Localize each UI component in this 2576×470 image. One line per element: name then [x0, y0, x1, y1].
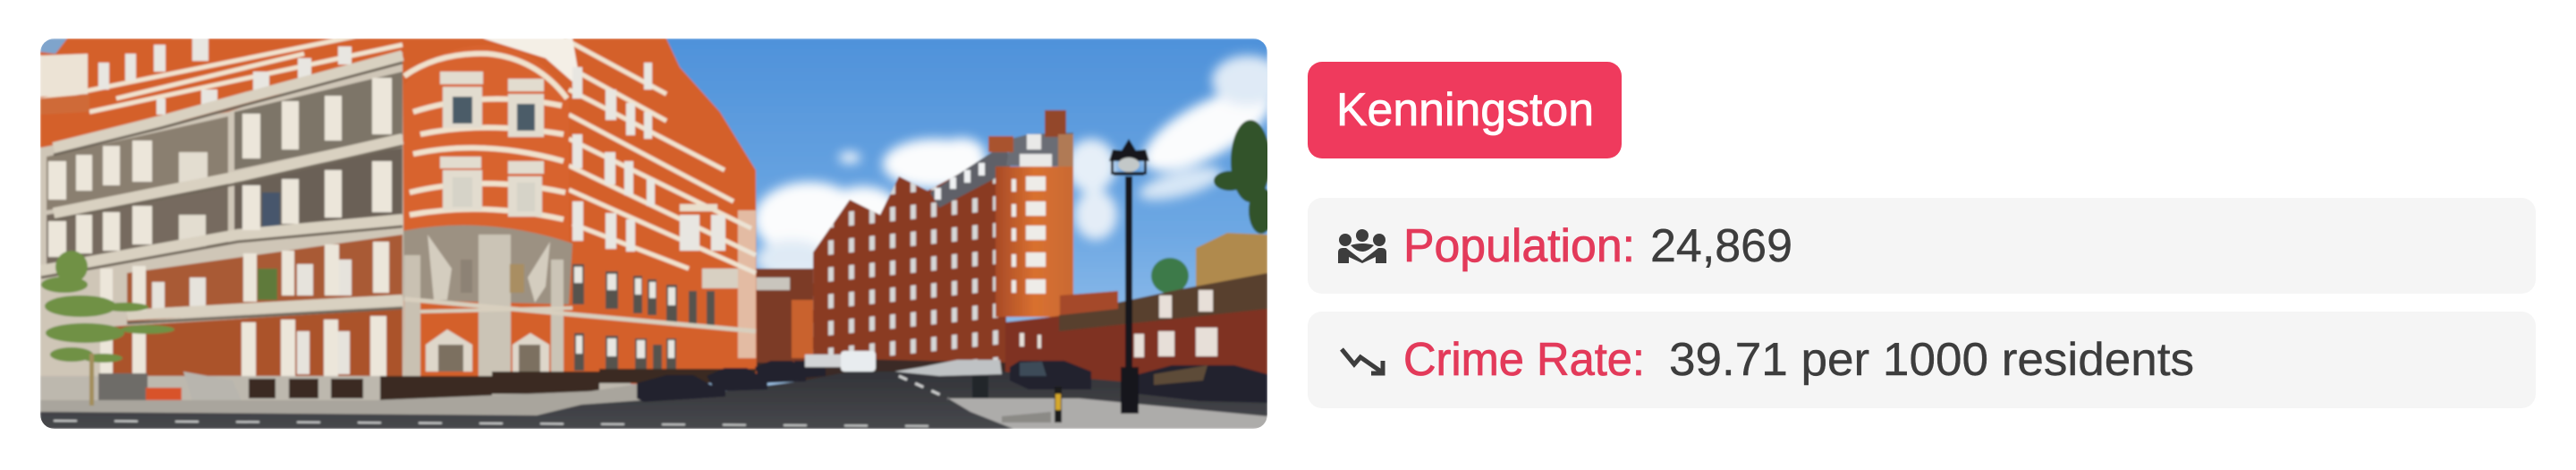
sky — [630, 38, 1267, 387]
distant buildings at street end — [754, 269, 813, 363]
railings and pavement — [40, 376, 631, 400]
district name badge: Kenningston — [1336, 84, 1594, 136]
balconies — [41, 56, 402, 315]
yellow brick building — [1196, 233, 1267, 286]
loggia — [40, 52, 404, 385]
small tree — [1151, 258, 1189, 294]
bin and bollard — [972, 376, 988, 398]
main dark brick block — [813, 158, 1006, 363]
right tree — [1214, 120, 1274, 234]
left wing stripes — [40, 27, 756, 273]
photo: Kennington street with red-brick mansion blocks — [40, 27, 1284, 429]
traffic island — [948, 398, 1267, 429]
left building: base brick — [40, 38, 757, 403]
curved corner tower — [567, 115, 570, 193]
crime rate row: 39.71 per 1000 residents — [1669, 334, 2194, 386]
white van and cars — [841, 351, 876, 372]
icon: falling trend arrow — [1342, 349, 1383, 373]
lamp post — [1109, 139, 1149, 414]
tower base windows — [426, 329, 549, 372]
tower windows — [440, 72, 544, 217]
clouds — [754, 56, 1284, 292]
district name badge — [1308, 62, 1622, 158]
wing windows — [98, 38, 352, 115]
icon: people group — [1338, 229, 1386, 263]
white bay on far corner — [738, 210, 756, 358]
columns — [48, 78, 392, 376]
population row — [1308, 198, 2536, 294]
road — [40, 372, 1267, 429]
population row: 24,869 — [1650, 220, 1792, 272]
parked cars — [637, 361, 1267, 403]
left street tree — [41, 251, 174, 363]
dark base behind cars — [755, 358, 1007, 381]
tower lower stonework — [402, 226, 572, 304]
top wing cream — [40, 38, 67, 54]
crime rate row — [1308, 312, 2536, 408]
orange corner tower — [996, 167, 1073, 317]
population row: Population: — [1403, 220, 1635, 272]
low terrace — [1004, 307, 1267, 383]
right building — [751, 110, 1073, 380]
recessed floors — [234, 72, 402, 170]
crime rate row: Crime Rate: — [1403, 334, 1645, 386]
